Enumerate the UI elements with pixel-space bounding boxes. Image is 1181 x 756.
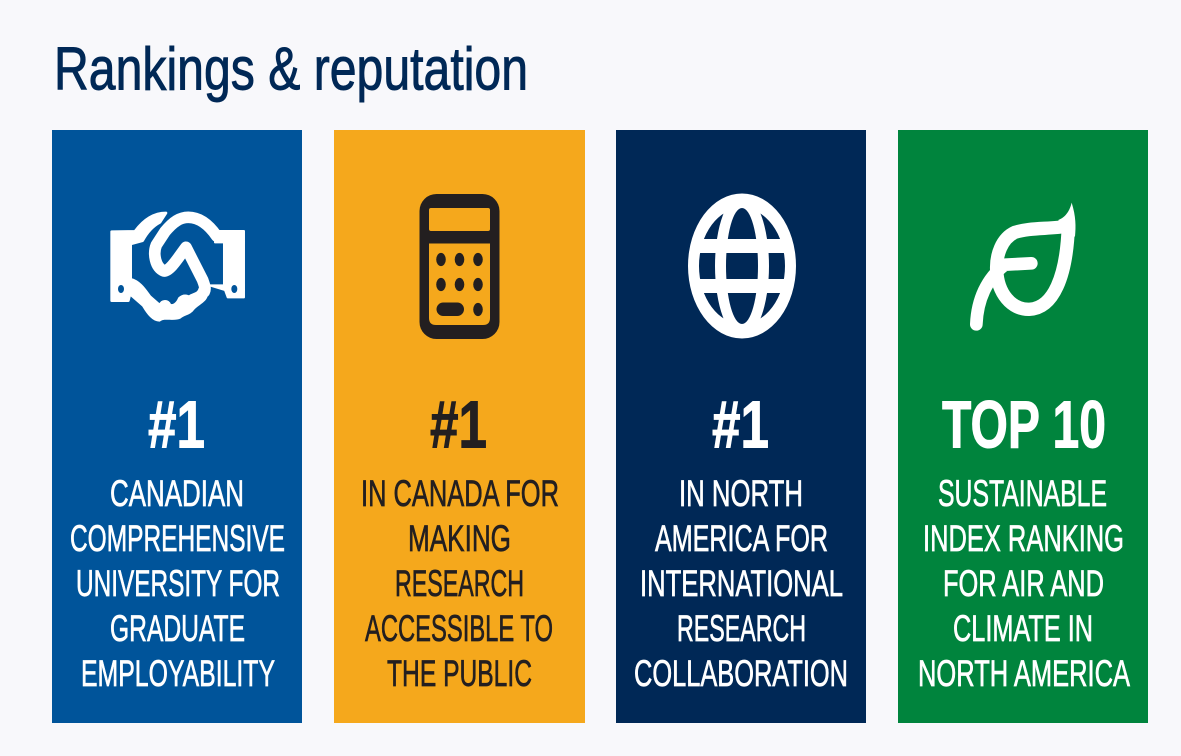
stat: #1: #1: [712, 388, 769, 462]
stat: #1: #1: [148, 388, 205, 462]
icon: globe: [688, 194, 796, 338]
description: [70, 472, 285, 694]
description: CLIMATE IN: [953, 607, 1093, 649]
description: AMERICA FOR: [655, 517, 828, 559]
description: RESEARCH: [395, 562, 524, 604]
description: FOR AIR AND: [943, 562, 1104, 604]
stat: #1: #1: [430, 388, 487, 462]
description: RESEARCH: [677, 607, 806, 649]
description: GRADUATE: [110, 607, 245, 649]
description: EMPLOYABILITY: [81, 652, 275, 694]
description: UNIVERSITY FOR: [76, 562, 280, 604]
description: [918, 472, 1130, 694]
panel: sustainability: [898, 130, 1148, 723]
icon: leaf: [976, 203, 1076, 324]
description: CANADIAN: [110, 472, 244, 514]
description: THE PUBLIC: [387, 652, 532, 694]
description: INTERNATIONAL: [640, 562, 843, 604]
description: IN CANADA FOR: [361, 472, 559, 514]
description: [361, 472, 559, 694]
panel: accessible research: [334, 130, 585, 723]
description: COMPREHENSIVE: [70, 517, 285, 559]
description: COLLABORATION: [634, 652, 848, 694]
title: Rankings & reputation: [54, 36, 528, 102]
description: MAKING: [408, 517, 511, 559]
icon: handshake: [112, 213, 244, 320]
description: IN NORTH: [679, 472, 803, 514]
description: ACCESSIBLE TO: [365, 607, 553, 649]
stat: top 10: TOP 10: [942, 388, 1106, 462]
description: [634, 472, 848, 694]
panel: graduate employability: [52, 130, 302, 723]
panel: international collaboration: [616, 130, 866, 723]
icon: calculator: [420, 194, 500, 339]
